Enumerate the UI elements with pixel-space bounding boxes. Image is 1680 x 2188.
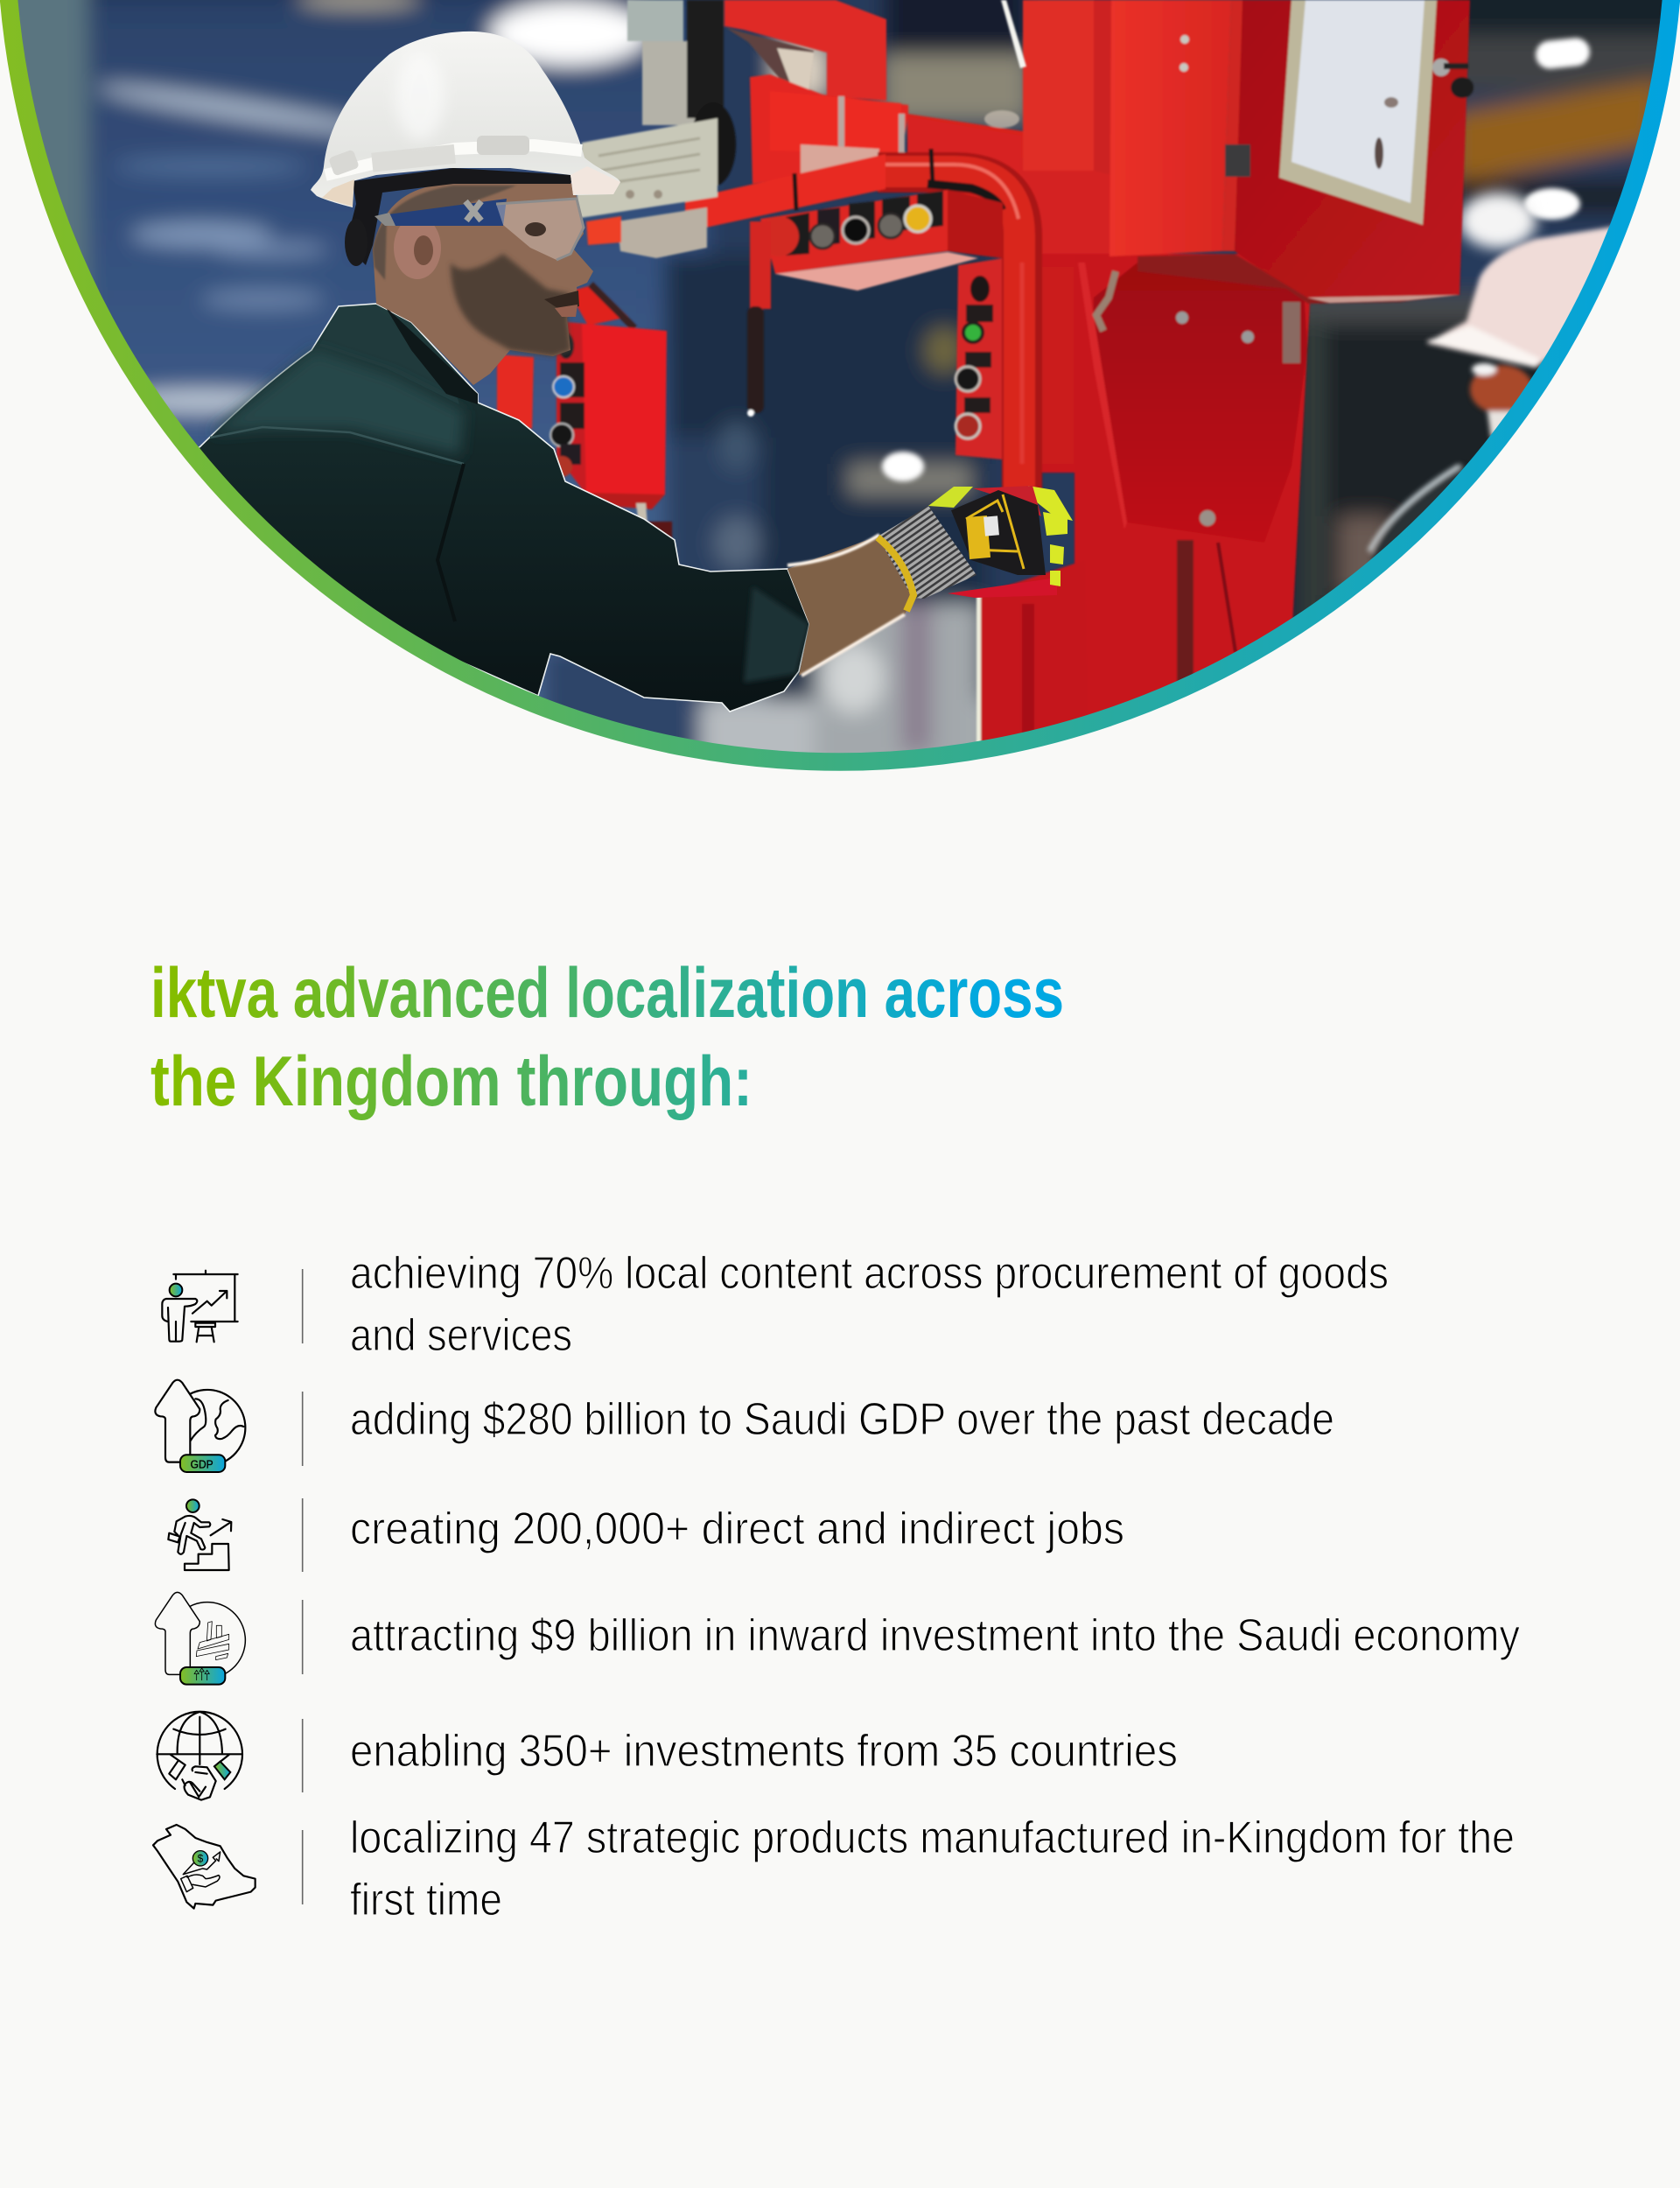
icon: GDP arrow and globe bbox=[155, 1380, 245, 1472]
vertical pendant bbox=[956, 258, 1003, 459]
icon: globe and handshake bbox=[157, 1712, 242, 1800]
neck and head bbox=[373, 181, 593, 385]
tube bbox=[878, 172, 1022, 494]
control box buttons bbox=[558, 333, 574, 359]
icon: presenter with chart bbox=[162, 1271, 238, 1342]
glove cuff and knit bbox=[878, 506, 976, 599]
text: 200,000+ jobs: creating 200,000+ direct and indirect jobs bbox=[350, 1504, 1124, 1554]
black cable and ties bbox=[928, 184, 1002, 210]
heading: the Kingdom through: bbox=[150, 1042, 752, 1121]
hair bbox=[373, 186, 516, 280]
beard bbox=[451, 254, 573, 356]
text: 350+ investments: enabling 350+ investments from 35 countries bbox=[350, 1726, 1178, 1777]
paper frame on box bbox=[1279, 0, 1437, 225]
silver bracket and sign bbox=[627, 0, 683, 41]
item 2: GDP bbox=[155, 1380, 1334, 1472]
labels and buttons on box bbox=[786, 213, 809, 256]
lower column bbox=[1074, 254, 1312, 753]
icon: investment arrow and globe bbox=[155, 1592, 245, 1685]
worker in foreground bbox=[166, 32, 1073, 712]
item 4: inward investment bbox=[155, 1592, 1520, 1685]
blurred ceiling lights bbox=[882, 37, 1592, 481]
icon: Saudi map with hand and coin bbox=[153, 1825, 256, 1909]
back panels bbox=[906, 113, 1025, 200]
soft white light behind second worker bbox=[1460, 193, 1536, 249]
text: 47 strategic products: first time bbox=[350, 1875, 502, 1925]
pendant buttons bbox=[970, 276, 990, 302]
text: $9 billion: attracting $9 billion in inward investment into the Saudi economy bbox=[350, 1610, 1520, 1661]
text: 70% local content bbox=[350, 1248, 1389, 1361]
helmet strap and earpiece bbox=[346, 168, 573, 265]
hard hat bbox=[311, 32, 620, 207]
box block bbox=[750, 74, 908, 184]
box hardware bbox=[1225, 144, 1250, 177]
top arm bbox=[724, 0, 886, 101]
right column bbox=[1021, 0, 1096, 170]
main box front bbox=[1110, 0, 1231, 256]
item 3: jobs bbox=[168, 1498, 1124, 1572]
arm skin bbox=[788, 536, 913, 676]
text: 47 strategic products: localizing 47 strategic products manufactured in-Kingdom for the bbox=[350, 1813, 1515, 1863]
small red control box bbox=[569, 284, 628, 326]
left column slab bbox=[980, 562, 1076, 740]
text: $280 billion GDP: adding $280 billion to Saudi GDP over the past decade bbox=[350, 1394, 1334, 1445]
item 5: investments from countries bbox=[157, 1712, 1178, 1800]
item 6: strategic products bbox=[153, 1813, 1515, 1925]
photo: worker operating red machine, clipped to circle bbox=[0, 0, 1680, 805]
item 1: local content bbox=[162, 1248, 1389, 1361]
heading: iktva advanced localization across bbox=[150, 954, 1064, 1033]
red machine bbox=[497, 0, 1474, 770]
heading bbox=[150, 954, 1064, 1121]
text: 47 strategic products bbox=[350, 1813, 1515, 1925]
icon: person climbing stairs bbox=[168, 1499, 231, 1570]
white light streak bbox=[1001, 0, 1026, 68]
icon: GDP arrow and globe: GDP bbox=[191, 1458, 214, 1470]
text: 70% local content: and services bbox=[350, 1310, 572, 1361]
second worker, out of focus bbox=[1369, 226, 1619, 578]
ear bbox=[394, 216, 441, 279]
icon: Saudi map with hand and coin: $ bbox=[198, 1853, 204, 1865]
text: 70% local content: achieving 70% local content across procurement of goods bbox=[350, 1248, 1389, 1299]
blurred factory background bbox=[0, 0, 1680, 805]
arm to right bbox=[907, 116, 1021, 171]
shirt bbox=[166, 304, 809, 712]
gradient ring around photo bbox=[5, 0, 1675, 761]
button box bbox=[760, 188, 949, 275]
handle bbox=[750, 221, 771, 309]
safety glasses bbox=[374, 199, 507, 226]
main box side bbox=[1235, 0, 1470, 302]
glove palm and fingers bbox=[948, 578, 1057, 598]
lever arm bbox=[685, 154, 886, 232]
